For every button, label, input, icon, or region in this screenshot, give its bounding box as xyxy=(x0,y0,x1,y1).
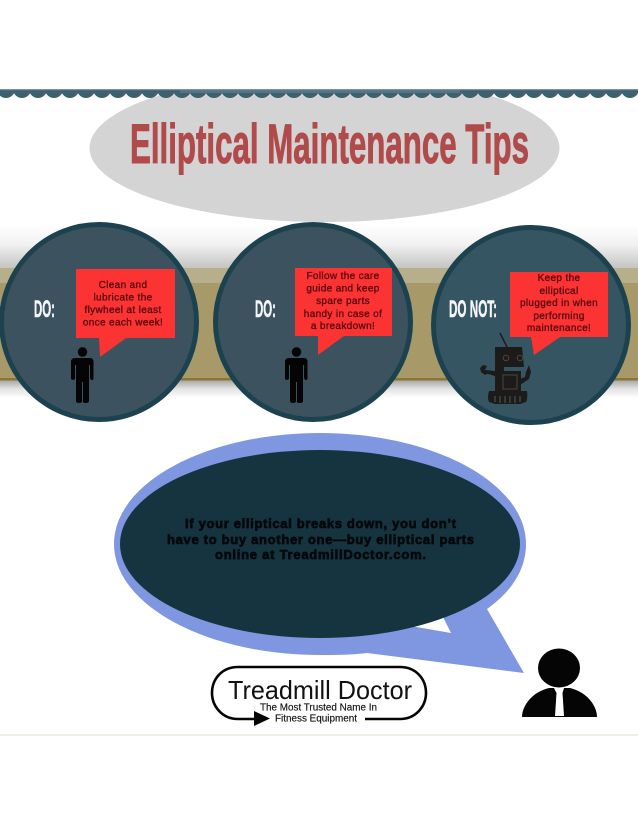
title ellipse xyxy=(90,74,560,222)
tip text 2: guide and keep xyxy=(306,284,380,294)
panel: do clean xyxy=(2,224,196,420)
logo name: Treadmill Doctor xyxy=(228,675,412,705)
top scalloped border xyxy=(0,60,638,98)
tip text 3: maintenance! xyxy=(527,323,591,334)
circle 1 xyxy=(2,224,196,420)
logo: Treadmill Doctor xyxy=(212,667,426,726)
callout text: have to buy another one—buy elliptical parts xyxy=(167,532,474,547)
tip text 3: plugged in when xyxy=(520,298,598,309)
tip text 2: spare parts xyxy=(316,296,370,307)
callout text: online at TreadmillDoctor.com. xyxy=(215,547,426,562)
callout text: If your elliptical breaks down, you don’t xyxy=(185,516,457,531)
tip text 1: lubricate the xyxy=(93,292,153,304)
panel: do clean: DO: xyxy=(34,296,55,323)
logo outline xyxy=(212,667,426,719)
logo arrow xyxy=(254,711,270,726)
icon: robot xyxy=(480,333,531,404)
tip text 1: Clean and xyxy=(99,280,147,291)
bubble highlight notch xyxy=(405,617,451,633)
icon: person 2 xyxy=(285,347,308,403)
bubble outer xyxy=(114,433,526,673)
icon: person 1 xyxy=(71,347,94,403)
background band with shadows xyxy=(0,225,638,398)
callout text xyxy=(167,516,474,562)
bubble inner xyxy=(120,450,520,638)
panel: do not unplugged: DO NOT: xyxy=(449,296,497,323)
speech bubble 1 xyxy=(76,269,175,357)
speech bubble 3 xyxy=(510,272,608,355)
panel: do care guide: DO: xyxy=(255,296,276,323)
tip text 2: Follow the care xyxy=(306,271,380,282)
tip text 3: Keep the xyxy=(538,273,581,284)
tip text 1: once each week! xyxy=(83,318,163,328)
tip text 3: elliptical xyxy=(539,286,579,297)
callout: big speech bubble xyxy=(114,433,526,673)
logo tagline line 2: Fitness Equipment xyxy=(275,714,357,724)
circle 2 xyxy=(216,224,410,420)
circle 3 xyxy=(434,228,628,422)
tip text 2: handy in case of xyxy=(304,309,382,320)
tip text 2: a breakdown! xyxy=(311,321,375,332)
panel: do not unplugged xyxy=(434,228,628,422)
tip text 3: performing xyxy=(533,311,585,322)
logo tagline line 1: The Most Trusted Name In xyxy=(260,702,377,714)
panel: do care guide xyxy=(216,224,410,420)
bottom rule xyxy=(0,734,638,736)
icon: businessperson xyxy=(522,648,597,717)
speech bubble 2 xyxy=(295,268,392,355)
tip text 1: flywheel at least xyxy=(84,305,162,316)
